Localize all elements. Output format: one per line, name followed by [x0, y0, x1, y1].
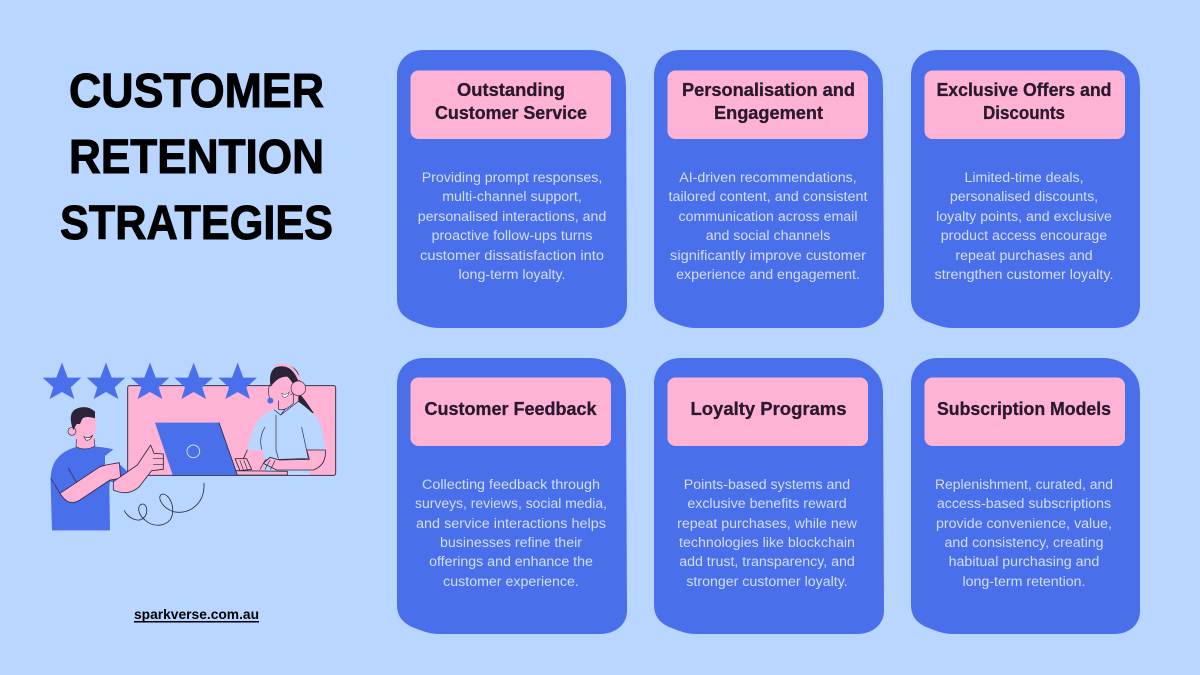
text block: exclusive offers and discounts: repeat purchases and: [955, 248, 1093, 264]
text block: personalisation and engagement: significantly improve customer: [670, 248, 866, 264]
heading: personalisation and engagement: Engagement: [714, 102, 823, 123]
panel: personalisation and engagement: [654, 50, 884, 328]
text block: outstanding customer service: [418, 170, 606, 283]
heading: loyalty programs: Loyalty Programs: [690, 398, 846, 419]
text block: subscription models: habitual purchasing and: [949, 554, 1099, 570]
text block: subscription models: long-term retention.: [962, 574, 1086, 590]
text block: exclusive offers and discounts: loyalty points, and exclusive: [936, 209, 1112, 225]
panel: outstanding customer service: [397, 50, 627, 328]
text block: customer feedback: [415, 477, 607, 590]
panel: subscription models: [911, 358, 1140, 634]
text block: outstanding customer service: customer dissatisfaction into: [420, 248, 604, 264]
text block: personalisation and engagement: experience and engagement.: [676, 267, 860, 283]
heading: exclusive offers and discounts: Discounts: [983, 102, 1065, 123]
text block: personalisation and engagement: [668, 170, 868, 283]
title: STRATEGIES: [60, 197, 333, 250]
text block: loyalty programs: stronger customer loyalty.: [686, 574, 848, 590]
icon: man giving thumbs up: [51, 407, 163, 530]
title: [60, 65, 333, 250]
text block: personalisation and engagement: communication across email: [678, 209, 858, 225]
text block: outstanding customer service: Providing prompt responses,: [422, 170, 602, 186]
icon: five rating stars: [43, 363, 257, 399]
text block: subscription models: provide convenience, value,: [936, 516, 1112, 532]
heading: subscription models: [924, 378, 1125, 446]
text block: loyalty programs: exclusive benefits reward: [687, 496, 847, 512]
text block: customer feedback: customer experience.: [443, 574, 579, 590]
heading: personalisation and engagement: Personalisation and: [682, 79, 855, 100]
text block: exclusive offers and discounts: strengthen customer loyalty.: [934, 267, 1114, 283]
website link: sparkverse.com.au: [134, 606, 259, 622]
title: RETENTION: [69, 131, 324, 184]
text block: outstanding customer service: multi-channel support,: [442, 189, 582, 205]
text block: outstanding customer service: long-term loyalty.: [459, 267, 565, 283]
title: CUSTOMER: [69, 65, 324, 118]
icon: laptop: [155, 423, 287, 475]
heading: subscription models: Subscription Models: [937, 398, 1111, 419]
heading: exclusive offers and discounts: Exclusive Offers and: [936, 79, 1112, 100]
text block: exclusive offers and discounts: personalised discounts,: [950, 189, 1098, 205]
heading: loyalty programs: [668, 378, 868, 446]
heading: customer feedback: [410, 378, 611, 446]
text block: subscription models: [935, 477, 1113, 590]
heading: outstanding customer service: Outstanding: [457, 79, 565, 100]
panel: loyalty programs: [654, 358, 884, 634]
text block: customer feedback: businesses refine their: [440, 535, 582, 551]
panel: customer feedback: [397, 358, 627, 634]
text block: subscription models: Replenishment, curated, and: [935, 477, 1113, 493]
text block: loyalty programs: technologies like blockchain: [679, 535, 855, 551]
heading: customer feedback: Customer Feedback: [424, 398, 597, 419]
text block: outstanding customer service: proactive follow-ups turns: [432, 228, 592, 244]
heading: outstanding customer service: Customer Service: [435, 102, 587, 123]
text block: personalisation and engagement: AI-driven recommendations,: [679, 170, 857, 186]
text block: exclusive offers and discounts: [934, 170, 1114, 283]
text block: exclusive offers and discounts: product access encourage: [941, 228, 1107, 244]
text block: loyalty programs: repeat purchases, while new: [677, 516, 858, 532]
text block: customer feedback: and service interactions helps: [416, 516, 606, 532]
text block: personalisation and engagement: and social channels: [706, 228, 830, 244]
text block: customer feedback: offerings and enhance the: [429, 554, 593, 570]
heading: outstanding customer service: [410, 70, 611, 139]
text block: outstanding customer service: personalised interactions, and: [418, 209, 606, 225]
icon: support agent with headset: [235, 365, 325, 475]
text block: subscription models: access-based subscriptions: [937, 496, 1111, 512]
text block: loyalty programs: add trust, transparency, and: [679, 554, 855, 570]
text block: loyalty programs: [677, 477, 858, 590]
illustration: customer support with five stars: [43, 363, 336, 530]
heading: personalisation and engagement: [668, 70, 868, 139]
heading: exclusive offers and discounts: [924, 70, 1125, 139]
text block: subscription models: and consistency, creating: [944, 535, 1104, 551]
panel: exclusive offers and discounts: [911, 50, 1140, 328]
text block: personalisation and engagement: tailored content, and consistent: [668, 189, 868, 205]
panel: pink support window: [128, 386, 336, 475]
text block: customer feedback: Collecting feedback through: [422, 477, 600, 493]
text block: customer feedback: surveys, reviews, social media,: [415, 496, 607, 512]
text block: loyalty programs: Points-based systems and: [684, 477, 850, 493]
decorative squiggle: [124, 483, 204, 525]
text block: exclusive offers and discounts: Limited-time deals,: [964, 170, 1084, 186]
